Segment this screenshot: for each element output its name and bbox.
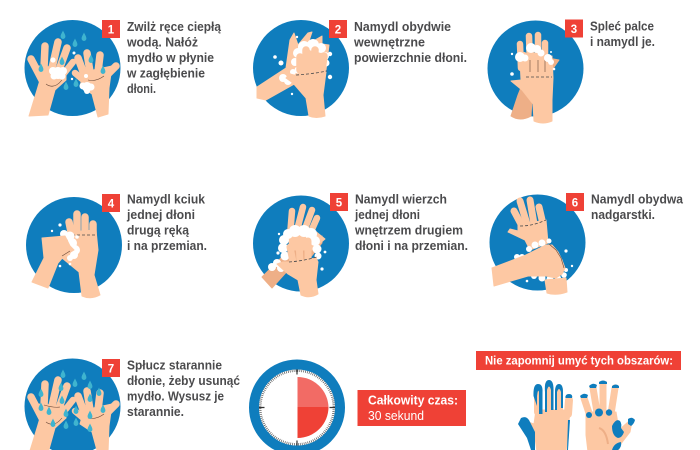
text: step 5: Namydl wierzch bbox=[355, 192, 447, 206]
step 6 bbox=[490, 192, 684, 294]
number badge 2: 2 bbox=[335, 24, 341, 36]
number badge 6 bbox=[566, 193, 584, 211]
icon: back of hand with missed areas bbox=[518, 380, 572, 450]
number badge 1: 1 bbox=[108, 24, 115, 36]
text: step 5: jednej dłoni bbox=[354, 208, 420, 222]
step 3 bbox=[488, 20, 655, 123]
step 4 bbox=[26, 192, 207, 298]
icon: palm with missed areas bbox=[580, 380, 635, 450]
text: step 6: Namydl obydwa bbox=[591, 192, 684, 206]
callout: total time bbox=[358, 390, 466, 426]
callout: total time: Całkowity czas: bbox=[368, 394, 458, 408]
text: step 7: starannie. bbox=[127, 405, 184, 419]
heading banner: Nie zapomnij umyć tych obszarów: bbox=[485, 354, 673, 368]
step 2 bbox=[253, 20, 467, 118]
panel: areas not to forget bbox=[476, 351, 681, 450]
number badge 6: 6 bbox=[572, 198, 578, 210]
icon: wet hands with soap bbox=[24, 20, 120, 117]
icon: rinsing hands bbox=[24, 358, 120, 450]
text: step 2: Namydl obydwie bbox=[354, 20, 451, 34]
text: step 1: mydło w płynie bbox=[127, 51, 214, 65]
icon: palm rubbing palm bbox=[253, 20, 349, 118]
text: step 5: wnętrzem drugiem bbox=[354, 224, 463, 238]
text: step 7: dłonie, żeby usunąć bbox=[127, 374, 240, 388]
timer bbox=[254, 364, 340, 450]
text: step 1: Zwilż ręce ciepłą bbox=[127, 20, 222, 34]
text: step 1: w zagłębienie bbox=[126, 66, 205, 80]
number badge 3: 3 bbox=[571, 24, 577, 36]
number badge 4: 4 bbox=[108, 198, 115, 210]
text: step 3: i namydl je. bbox=[590, 35, 655, 49]
icon: rubbing wrist and back of hand bbox=[26, 197, 122, 298]
text: step 4: jednej dłoni bbox=[126, 208, 195, 222]
number badge 2 bbox=[329, 20, 347, 38]
icon: interlaced fingers bbox=[488, 20, 584, 123]
number badge 4 bbox=[102, 194, 120, 212]
text: step 2: powierzchnie dłoni. bbox=[354, 51, 467, 65]
icon: palm over back of hand bbox=[253, 196, 349, 297]
step 7 bbox=[24, 358, 240, 450]
text: step 1: dłoni. bbox=[127, 82, 156, 96]
number badge 1 bbox=[102, 20, 120, 38]
number badge 5: 5 bbox=[336, 198, 343, 210]
text: step 5: dłoni i na przemian. bbox=[355, 239, 468, 253]
text: step 6: nadgarstki. bbox=[591, 208, 655, 222]
step 1 bbox=[24, 20, 222, 117]
number badge 7: 7 bbox=[108, 364, 114, 376]
callout: total time: 30 sekund bbox=[368, 409, 424, 423]
text: step 7: mydło. Wysusz je bbox=[127, 390, 224, 404]
text: step 4: Namydl kciuk bbox=[127, 192, 205, 206]
number badge 7 bbox=[102, 359, 120, 377]
icon: washing wrists bbox=[490, 194, 586, 294]
heading banner bbox=[476, 351, 681, 370]
text: step 7: Spłucz starannie bbox=[127, 358, 222, 372]
number badge 5 bbox=[330, 193, 348, 211]
text: step 1: wodą. Nałóż bbox=[126, 36, 198, 50]
text: step 4: drugą ręką bbox=[127, 224, 190, 238]
number badge 3 bbox=[565, 20, 583, 38]
text: step 2: wewnętrzne bbox=[353, 36, 425, 50]
text: step 4: i na przemian. bbox=[127, 239, 207, 253]
step 5 bbox=[253, 192, 468, 297]
text: step 3: Spleć palce bbox=[590, 20, 654, 34]
